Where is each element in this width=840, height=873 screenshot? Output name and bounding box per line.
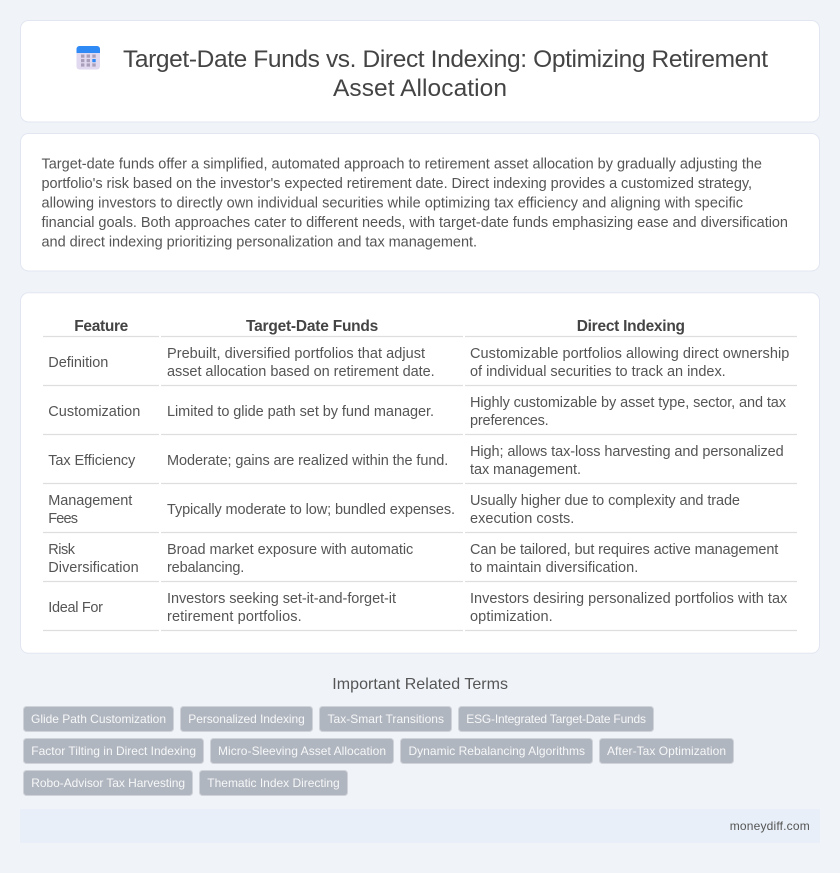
table row: management fees: Management <box>48 493 132 509</box>
table row: customization: preferences. <box>470 413 549 429</box>
panel: introduction <box>20 134 820 271</box>
tag <box>458 706 654 732</box>
table header row: Target-Date Funds <box>246 318 378 335</box>
table row: tax efficiency: Moderate; gains are realized within the fund. <box>167 453 448 469</box>
table row: customization <box>48 395 787 429</box>
panel: header <box>20 20 820 122</box>
table row: customization: Customization <box>48 404 140 420</box>
table row: management fees <box>48 493 740 527</box>
tag: Personalized Indexing <box>188 712 305 726</box>
text block: introduction paragraph: financial goals. Both approaches cater to different needs, with target-date funds emphasizing ease and diversification <box>42 215 788 231</box>
table row: risk diversification <box>48 542 778 576</box>
title: Asset Allocation <box>333 75 507 102</box>
footer: moneydiff.com <box>730 819 810 833</box>
title: Target-Date Funds vs. Direct Indexing: Optimizing Retirement <box>123 46 768 73</box>
table row: risk diversification: Broad market exposure with automatic <box>167 542 413 558</box>
table row: management fees: execution costs. <box>470 511 574 527</box>
table row: definition: Prebuilt, diversified portfolios that adjust <box>167 346 425 362</box>
table row: ideal for: Investors desiring personalized portfolios with tax <box>470 591 788 607</box>
tag: Factor Tilting in Direct Indexing <box>31 744 196 758</box>
table row: customization: Highly customizable by asset type, sector, and tax <box>470 395 787 411</box>
table header row <box>74 318 685 335</box>
table row: ideal for: retirement portfolios. <box>167 609 302 625</box>
table row: risk diversification: to maintain diversification. <box>470 560 638 576</box>
tag: Robo-Advisor Tax Harvesting <box>31 776 185 790</box>
tag <box>320 706 452 732</box>
tag: After-Tax Optimization <box>607 744 726 758</box>
tag: Thematic Index Directing <box>207 776 340 790</box>
table row: definition: Customizable portfolios allowing direct ownership <box>470 346 789 362</box>
table row: risk diversification: Risk <box>48 542 76 558</box>
table header row: Direct Indexing <box>577 318 685 335</box>
title <box>123 46 768 102</box>
table row: customization: Limited to glide path set by fund manager. <box>167 404 434 420</box>
tags: related terms <box>24 706 734 796</box>
footer <box>20 809 820 843</box>
table row: tax efficiency: tax management. <box>470 462 581 478</box>
tag: ESG-Integrated Target-Date Funds <box>466 712 646 726</box>
tag <box>24 770 192 796</box>
tag: Micro-Sleeving Asset Allocation <box>218 744 386 758</box>
tag <box>180 706 312 732</box>
tag <box>24 738 204 764</box>
tag <box>200 770 348 796</box>
table row: ideal for: optimization. <box>470 609 553 625</box>
text block: introduction paragraph <box>42 156 788 250</box>
tag <box>24 706 174 732</box>
table row: definition: of individual securities to track an index. <box>470 364 726 380</box>
table row: ideal for: Ideal For <box>48 600 103 616</box>
table row: tax efficiency: High; allows tax-loss harvesting and personalized <box>470 444 784 460</box>
table row: risk diversification: Can be tailored, but requires active management <box>470 542 778 558</box>
icon: calendar <box>76 46 100 70</box>
text block: introduction paragraph: and direct indexing prioritizing personalization and tax management. <box>42 234 477 250</box>
text block: introduction paragraph: portfolio's risk based on the investor's expected retirement date. Direct indexing provides a customized strategy, <box>42 176 752 192</box>
table header row: Feature <box>74 318 129 335</box>
table row: definition: asset allocation based on retirement date. <box>167 364 435 380</box>
text block: introduction paragraph: allowing investors to directly own individual securities while optimizing tax efficiency and aligning with specific <box>42 196 743 212</box>
tag: Tax-Smart Transitions <box>328 712 444 726</box>
tag <box>600 738 734 764</box>
heading: important related terms: Important Related Terms <box>332 676 508 693</box>
table row: management fees: Fees <box>48 511 78 527</box>
text block: introduction paragraph: Target-date funds offer a simplified, automated approach to retirement asset allocation by gradually adjusting the <box>42 156 762 172</box>
tag <box>400 738 592 764</box>
table row: definition: Definition <box>48 355 108 371</box>
table row: risk diversification: Diversification <box>48 560 139 576</box>
table row: tax efficiency <box>48 444 784 478</box>
tag <box>210 738 394 764</box>
table row: ideal for: Investors seeking set-it-and-forget-it <box>167 591 396 607</box>
table row: tax efficiency: Tax Efficiency <box>48 453 136 469</box>
table row: management fees: Typically moderate to low; bundled expenses. <box>167 502 455 518</box>
tag: Dynamic Rebalancing Algorithms <box>408 744 585 758</box>
panel: comparison table <box>20 293 820 653</box>
table row: ideal for <box>48 591 788 625</box>
tag: Glide Path Customization <box>31 712 166 726</box>
table row: risk diversification: rebalancing. <box>167 560 244 576</box>
table row: management fees: Usually higher due to complexity and trade <box>470 493 740 509</box>
table row: definition <box>48 346 789 380</box>
